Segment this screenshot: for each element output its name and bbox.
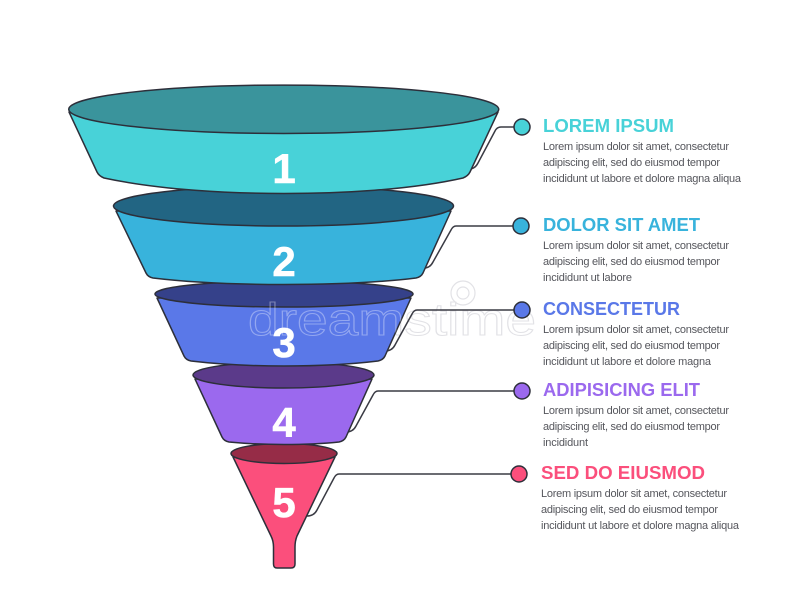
funnel segment 4 bbox=[193, 362, 374, 446]
text block 2: incididunt ut labore bbox=[543, 272, 632, 284]
text block 5: adipiscing elit, sed do eiusmod tempor bbox=[541, 504, 718, 516]
funnel segment 1: 1 bbox=[272, 145, 296, 192]
text block 3: CONSECTETUR bbox=[543, 299, 680, 319]
funnel segment 4: 4 bbox=[272, 399, 296, 446]
funnel segment 5 bbox=[231, 444, 337, 568]
text block 5: incididunt ut labore et dolore magna aliqua bbox=[541, 520, 740, 532]
text block 4: incididunt bbox=[543, 437, 588, 449]
funnel segment 3 bbox=[155, 281, 413, 366]
funnel segment 2 bbox=[114, 186, 454, 285]
text block 1: Lorem ipsum dolor sit amet, consectetur bbox=[543, 141, 729, 153]
watermark on background bbox=[248, 281, 536, 345]
text block 3: incididunt ut labore et dolore magna bbox=[543, 356, 712, 368]
connector 1 bbox=[469, 119, 530, 169]
watermark on background: dreamstime bbox=[248, 294, 536, 345]
funnel segment 3: 3 bbox=[272, 319, 296, 366]
text block 5: SED DO EIUSMOD bbox=[541, 463, 705, 483]
text block 2: DOLOR SIT AMET bbox=[543, 215, 700, 235]
text block 4: ADIPISICING ELIT bbox=[543, 380, 700, 400]
text block 4: adipiscing elit, sed do eiusmod tempor bbox=[543, 421, 720, 433]
text block 1: adipiscing elit, sed do eiusmod tempor bbox=[543, 157, 720, 169]
text block 3: Lorem ipsum dolor sit amet, consectetur bbox=[543, 324, 729, 336]
connector 3 bbox=[385, 302, 530, 351]
funnel segment 1 bbox=[69, 85, 499, 194]
connector 5 bbox=[307, 466, 527, 516]
text block 4 bbox=[543, 380, 729, 449]
text block 1: LOREM IPSUM bbox=[543, 116, 674, 136]
text block 4: Lorem ipsum dolor sit amet, consectetur bbox=[543, 405, 729, 417]
text block 5 bbox=[541, 463, 740, 532]
text block 2 bbox=[543, 215, 729, 284]
connector 2 bbox=[424, 218, 529, 268]
funnel segment 2: 2 bbox=[272, 238, 296, 285]
text block 1: incididunt ut labore et dolore magna aliqua bbox=[543, 173, 742, 185]
text block 2: Lorem ipsum dolor sit amet, consectetur bbox=[543, 240, 729, 252]
connector 4 bbox=[346, 383, 530, 432]
text block 1 bbox=[543, 116, 742, 185]
funnel segment 5: 5 bbox=[272, 479, 296, 526]
watermark over funnel: dreamstime bbox=[248, 294, 536, 345]
text block 2: adipiscing elit, sed do eiusmod tempor bbox=[543, 256, 720, 268]
text block 3 bbox=[543, 299, 729, 368]
text block 3: adipiscing elit, sed do eiusmod tempor bbox=[543, 340, 720, 352]
text block 5: Lorem ipsum dolor sit amet, consectetur bbox=[541, 488, 727, 500]
